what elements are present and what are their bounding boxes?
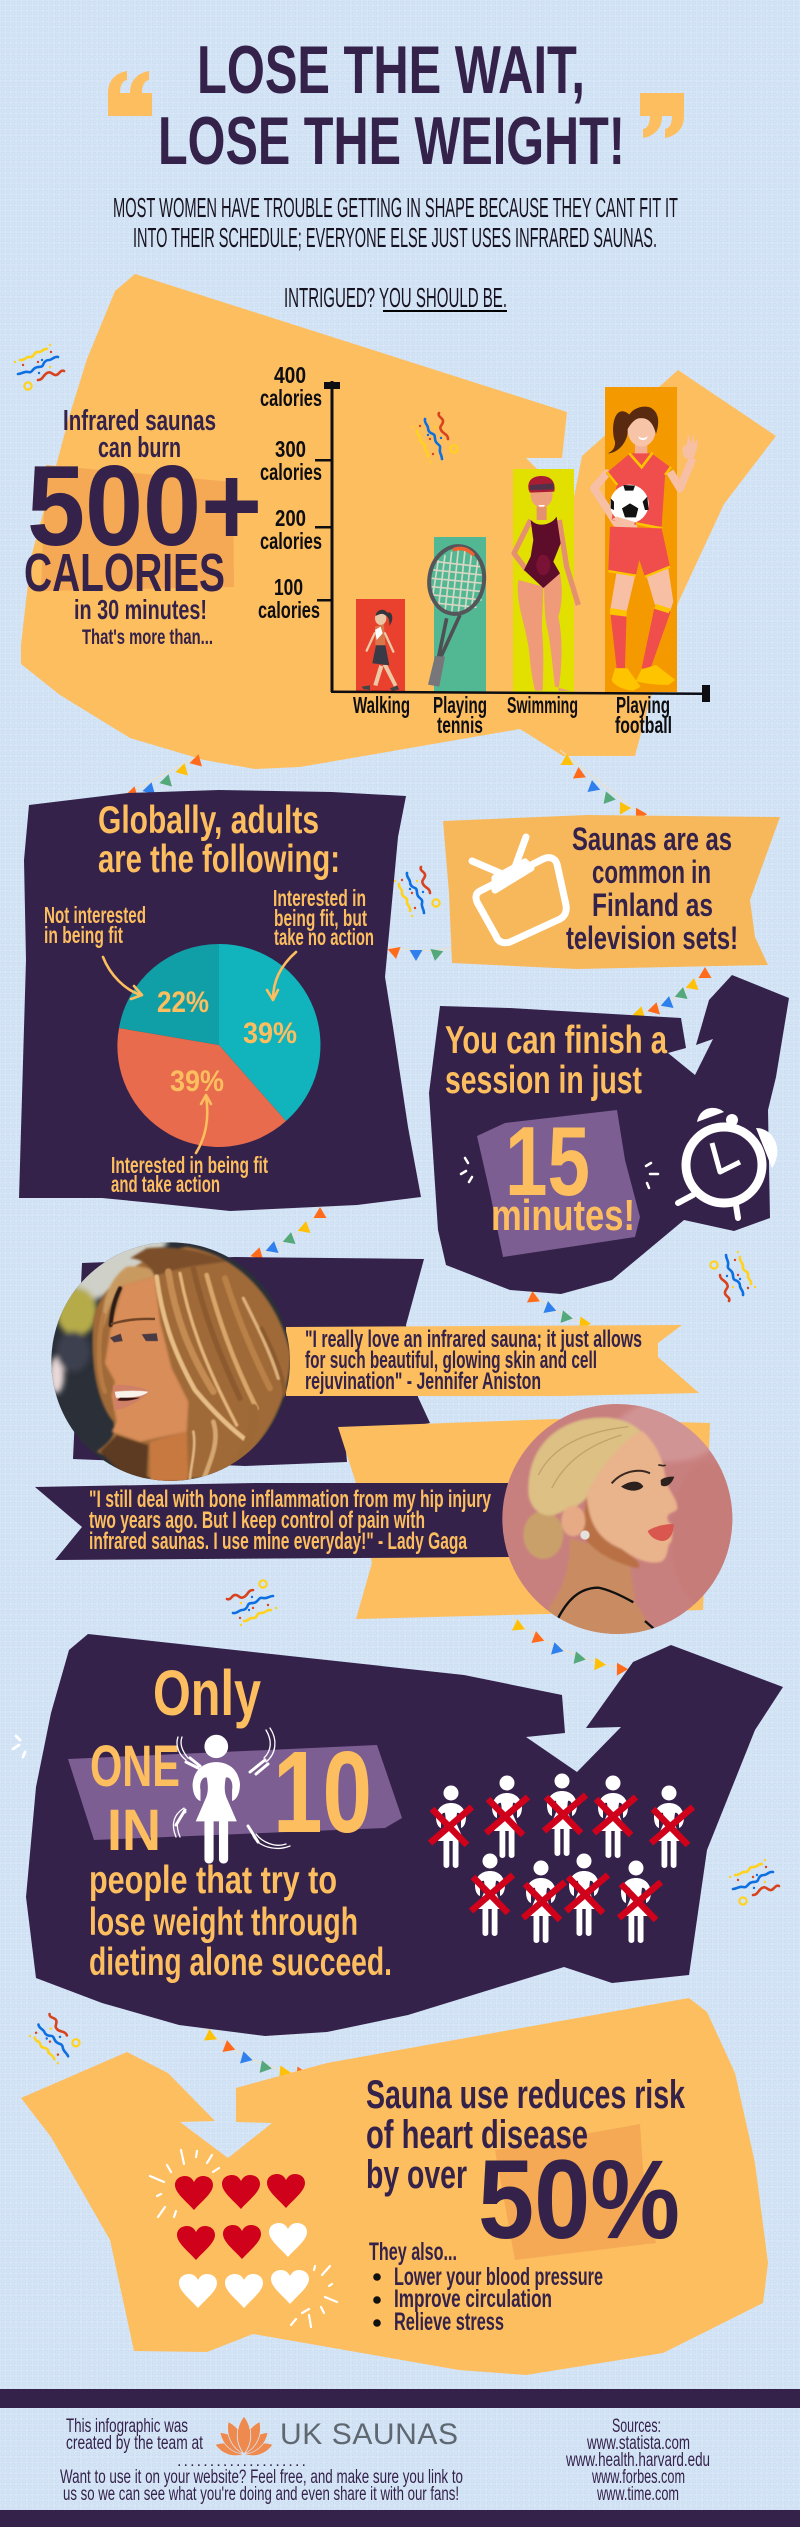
bunting: aniston [250, 1207, 326, 1260]
quote mark: opening [108, 71, 152, 116]
calories text [24, 405, 262, 649]
sparkle ticks [150, 2150, 337, 2327]
text: sauna risk: of heart disease [366, 2113, 588, 2157]
credit text: .................... [177, 2453, 306, 2470]
x axis labels [353, 692, 672, 738]
figure: footballer [594, 407, 698, 691]
pie labels: Interested in [273, 885, 366, 911]
text: sauna risk: 50% [478, 2137, 680, 2262]
y axis labels [258, 362, 322, 623]
text: people that try: people that try to [89, 1859, 337, 1902]
pie chart [117, 944, 320, 1147]
sources: www.statista.com [586, 2433, 690, 2454]
text: saunas as common: television sets! [566, 920, 738, 956]
pie labels: Interested in being fit [111, 1152, 268, 1178]
quote: aniston: "I really love an infrared sauna; it just allows [305, 1326, 642, 1353]
calories text: CALORIES [24, 543, 225, 603]
quote: aniston [305, 1326, 642, 1395]
white ticks left [13, 1736, 25, 1757]
x axis labels: Walking [353, 692, 410, 718]
pie labels: take no action [274, 924, 374, 950]
quote: gaga: two years ago. But I keep control of pain with [89, 1507, 425, 1534]
sources [565, 2416, 710, 2505]
y axis labels: 200 [275, 505, 306, 531]
title: LOSE THE WEIGHT! [158, 103, 625, 179]
bunting: top left [125, 753, 205, 799]
text: people that try: dieting alone succeed. [89, 1941, 392, 1984]
bunting: tv [388, 947, 452, 962]
panel: saunas in finland [443, 815, 780, 969]
sources: www.time.com [596, 2484, 679, 2505]
panel: only one in ten [26, 1634, 783, 2036]
title: LOSE THE WAIT, [197, 32, 585, 108]
pie chart: 39% [243, 1017, 297, 1050]
icon: highlighted person [193, 1735, 240, 1863]
quote mark: closing [640, 93, 684, 138]
y axis labels: 300 [275, 436, 306, 462]
bar: walking [356, 599, 405, 692]
calories highlight patch [41, 465, 234, 591]
calories text: in 30 minutes! [74, 594, 207, 625]
bar: swimming [513, 469, 574, 692]
text: people that try [89, 1859, 392, 1984]
quote: gaga [89, 1486, 491, 1555]
text: 15 minutes [491, 1106, 635, 1240]
text: only one in 10 [90, 1657, 372, 1863]
text: people that try: lose weight through [89, 1901, 358, 1944]
pie labels [44, 885, 374, 1197]
bunting: session [632, 967, 712, 1019]
quote: aniston: for such beautiful, glowing skin and cell [305, 1347, 597, 1374]
text: only one in 10: Only [153, 1657, 261, 1729]
title [158, 32, 625, 179]
text: only one in 10: ONE [90, 1734, 180, 1799]
heading: globally adults: are the following: [98, 838, 340, 881]
panel: session time [429, 975, 789, 1294]
credit text: Want to use it on your website? Feel free, and make sure you link to [60, 2467, 463, 2488]
benefits list: They also... [369, 2238, 457, 2266]
highlight: purple stripe [68, 1745, 402, 1840]
x axis labels: Playing [616, 692, 670, 718]
bar: tennis [434, 537, 486, 692]
pie labels: being fit, but [274, 905, 367, 931]
sources: www.health.harvard.edu [565, 2450, 710, 2471]
calories text: That's more than... [82, 626, 213, 649]
intro text [113, 192, 678, 253]
quote: gaga: "I still deal with bone inflammation from my hip injury [89, 1486, 491, 1513]
photo: Jennifer Aniston [51, 1242, 290, 1481]
sources: www.forbes.com [591, 2467, 685, 2488]
x axis labels: Swimming [507, 692, 578, 718]
x axis labels: Playing [433, 692, 487, 718]
bunting: heart [203, 2028, 308, 2079]
text: sauna risk [366, 2073, 686, 2262]
chart axes [315, 381, 710, 702]
calories text: 500+ [27, 443, 262, 570]
x axis labels: football [615, 712, 672, 738]
y axis labels: calories [260, 528, 322, 554]
benefits list: Lower your blood pressure [394, 2263, 603, 2291]
intrigued line: INTRIGUED? YOU SHOULD BE. [284, 282, 507, 313]
icons: nine hearts [175, 2174, 309, 2308]
panel: calories burned [21, 274, 776, 769]
text: saunas as common [566, 821, 738, 956]
credit text: This infographic was [66, 2416, 188, 2437]
text: 15 minutes: minutes! [491, 1191, 635, 1240]
calories text: Infrared saunas [63, 405, 216, 437]
y axis labels: calories [258, 597, 320, 623]
pie chart: 39% [170, 1065, 224, 1098]
x axis labels: tennis [437, 712, 483, 738]
credit text: us so we can see what you're doing and even share it with our fans! [63, 2484, 459, 2505]
quote: aniston: rejuvination" - Jennifer Aniston [305, 1368, 541, 1395]
footer band bottom [0, 2510, 800, 2527]
bunting: session lower [526, 1290, 591, 1329]
panel: heart disease [21, 1998, 768, 2375]
logo: lotus [213, 2416, 275, 2459]
bunting: gaga [511, 1618, 635, 1676]
figure: swimmer [514, 476, 578, 691]
figure: walking woman [362, 610, 399, 691]
y axis labels: 400 [274, 362, 306, 388]
bunting: top right [560, 750, 647, 821]
pie chart: 22% [157, 986, 209, 1019]
text: sauna risk: by over [366, 2153, 467, 2197]
icons: pointing hands [173, 1728, 290, 1848]
y axis labels: 100 [274, 574, 303, 600]
photo: Lady Gaga [502, 1404, 732, 1634]
ribbon: gaga quote [35, 1483, 510, 1560]
highlight: 50 percent patch [495, 2124, 656, 2260]
benefits list: Improve circulation [394, 2285, 552, 2313]
panel: globally adults [19, 790, 421, 1211]
text: sauna risk: Sauna use reduces risk [366, 2073, 686, 2117]
text: only one in 10: 10 [273, 1727, 372, 1857]
icons: nine crossed-out people [430, 1774, 693, 1943]
y axis labels: calories [260, 385, 322, 411]
arrows: pie [103, 952, 296, 1153]
icon: television [472, 837, 566, 943]
credit text [60, 2416, 463, 2505]
bar: football [605, 387, 677, 692]
logo: wordmark: UK SAUNAS [280, 2418, 458, 2451]
heading: globally adults: Globally, adults [98, 799, 319, 842]
quote: gaga: infrared saunas. I use mine everyday!" - Lady Gaga [89, 1528, 467, 1555]
calories text: can burn [98, 432, 181, 464]
sources: Sources: [612, 2416, 661, 2437]
text: only one in 10: IN [107, 1798, 161, 1863]
text: finish a session [445, 1019, 667, 1102]
icon: alarm clock [678, 1108, 777, 1218]
pie labels: and take action [111, 1171, 220, 1197]
text: 15 minutes: 15 [505, 1106, 590, 1216]
benefits list: Relieve stress [394, 2308, 504, 2336]
pie labels: in being fit [44, 922, 123, 948]
ticks around 15 [461, 1158, 658, 1188]
highlight: purple box [477, 1110, 640, 1257]
benefits list [369, 2238, 603, 2336]
credit text: created by the team at [66, 2433, 204, 2454]
figure: tennis racket [425, 543, 488, 687]
text: finish a session: You can finish a [445, 1019, 667, 1062]
heading: globally adults [98, 799, 340, 881]
ribbon: gaga orange backing [338, 1419, 710, 1619]
y axis labels: calories [260, 459, 322, 485]
text: saunas as common: Saunas are as [572, 821, 732, 857]
pie labels: Not interested [44, 902, 146, 928]
text: saunas as common: common in [592, 854, 711, 890]
ribbon: aniston backing [73, 1257, 430, 1466]
ribbon: aniston quote [286, 1325, 699, 1396]
footer band top [0, 2389, 800, 2408]
text: saunas as common: Finland as [592, 887, 713, 923]
bar chart [258, 362, 710, 738]
confetti group [14, 344, 779, 2071]
text: finish a session: session in just [445, 1059, 642, 1102]
